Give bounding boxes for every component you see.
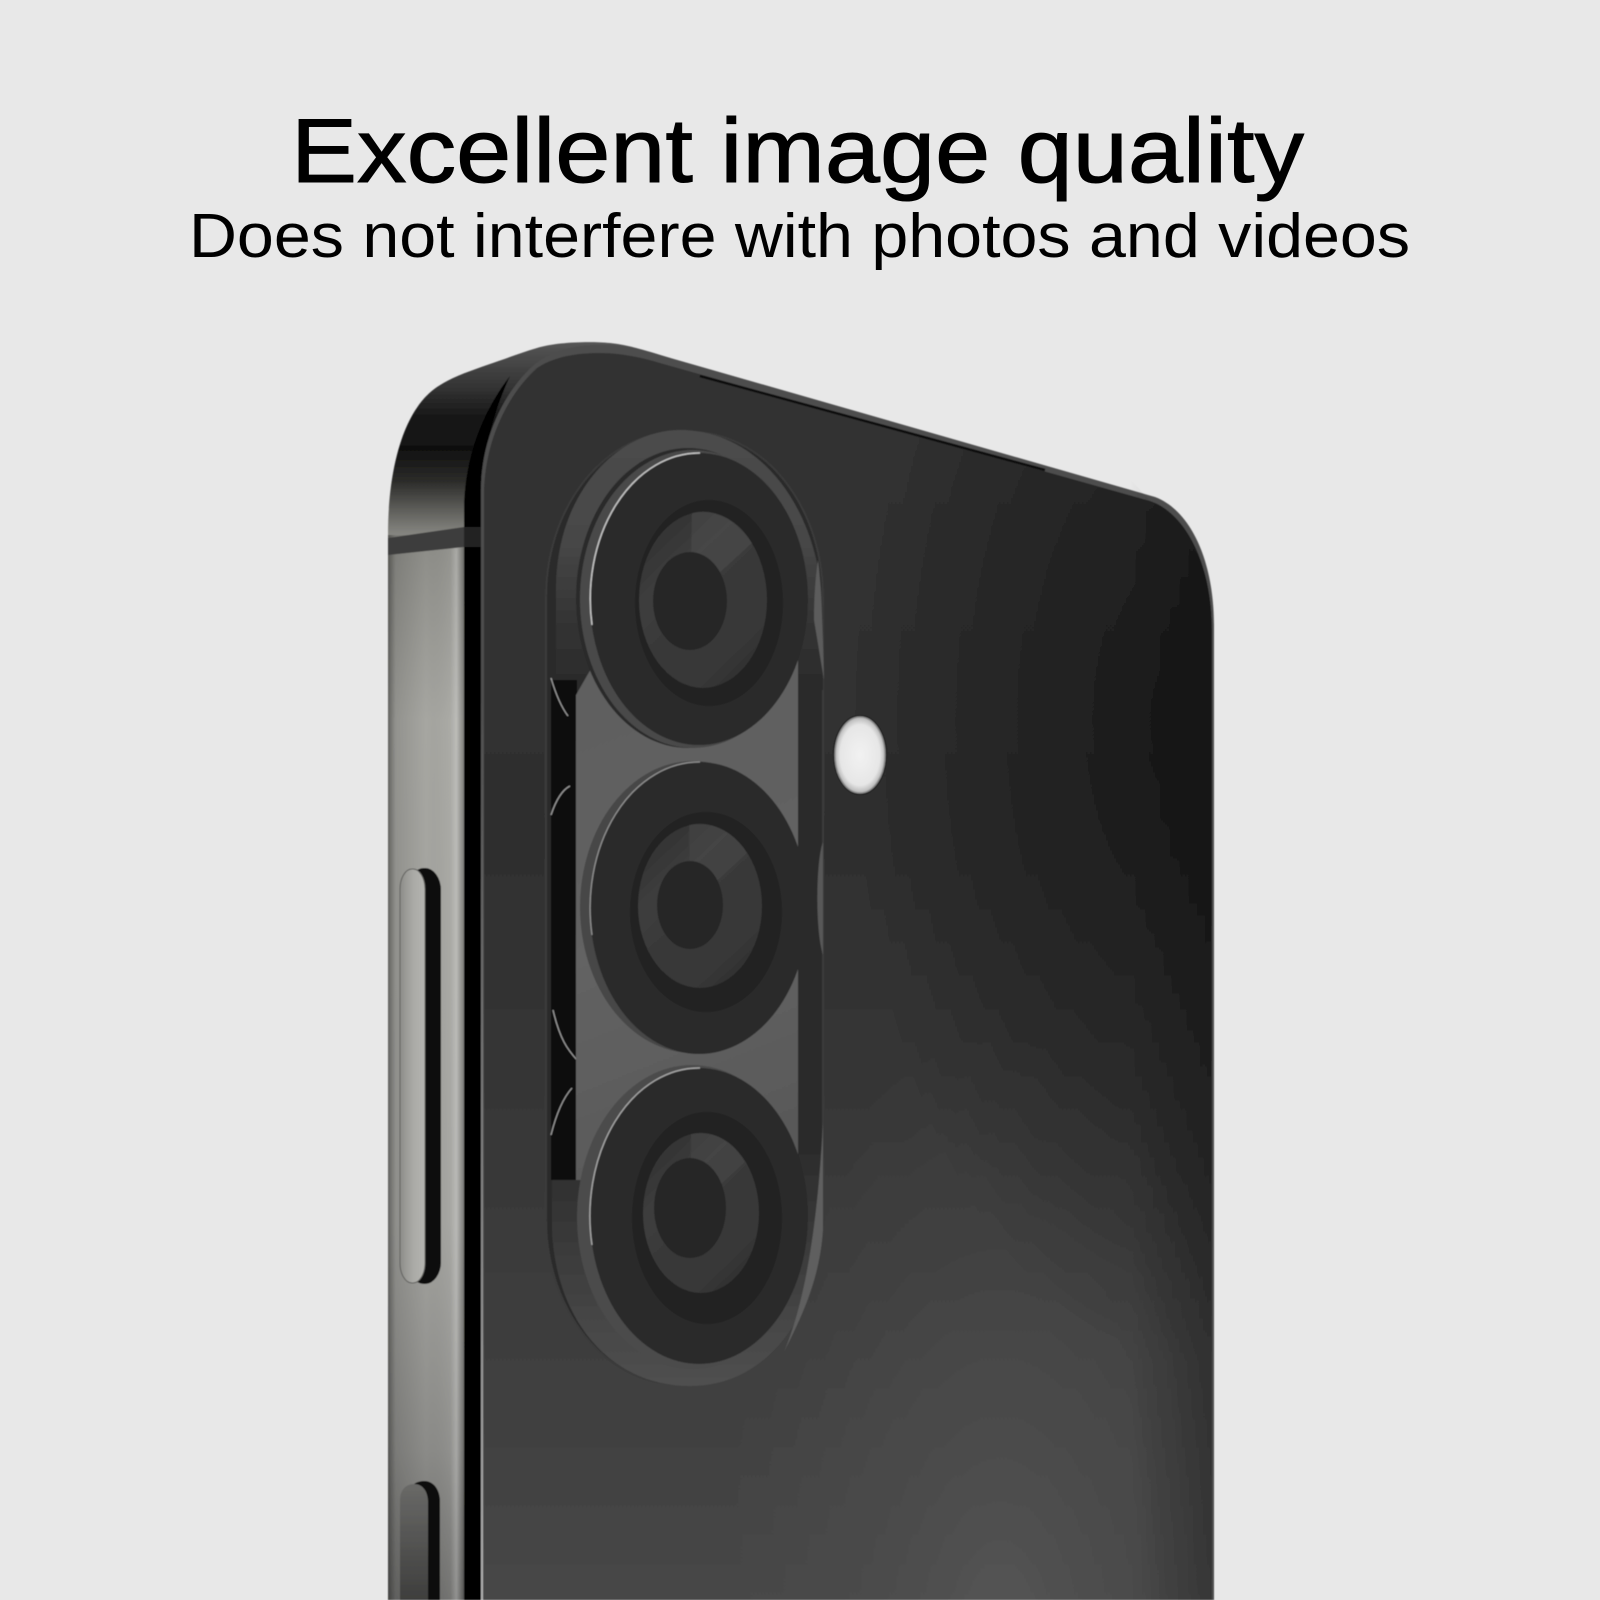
black seam between frame and back xyxy=(464,376,510,1600)
phone side frame xyxy=(388,342,700,1600)
subtitle: Does not interfere with photos and videos xyxy=(189,202,1410,271)
flash xyxy=(833,715,887,795)
glass rim of back panel xyxy=(481,345,1214,1600)
lens 3 xyxy=(577,1065,808,1369)
centre slab xyxy=(576,660,798,1180)
side button: lower key xyxy=(400,1481,440,1600)
glass rim: top xyxy=(556,430,823,690)
title: Excellent image quality xyxy=(291,101,1305,202)
edge highlight: middle xyxy=(817,842,823,955)
camera island xyxy=(546,430,824,1386)
lens 1 xyxy=(576,448,808,748)
lens 2 xyxy=(580,761,808,1054)
glass rim: bottom xyxy=(552,1150,823,1386)
back panel xyxy=(484,353,1212,1600)
black slot xyxy=(551,678,577,1180)
island plate xyxy=(546,432,823,1384)
edge highlight: lower xyxy=(784,1122,823,1352)
edge highlight: upper xyxy=(814,560,824,680)
side button: long key xyxy=(400,868,441,1284)
phone xyxy=(388,342,1214,1600)
antenna band over seam xyxy=(464,527,481,547)
rim highlight xyxy=(481,700,483,1600)
